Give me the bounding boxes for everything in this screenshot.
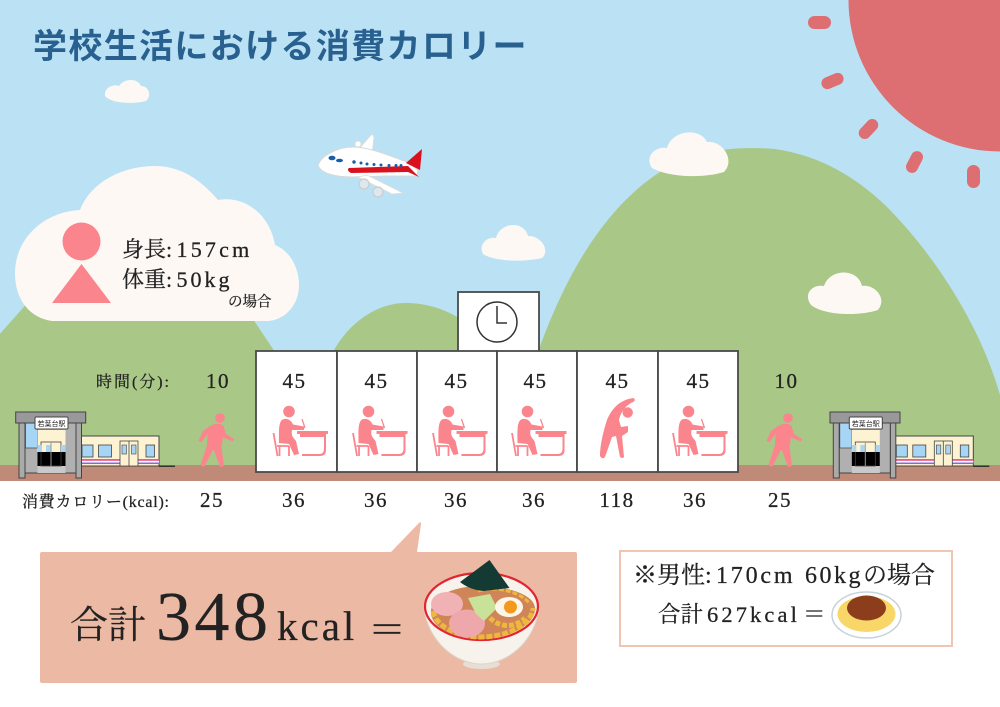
row label: minutes: 時間(分): <box>96 373 169 391</box>
cloud: person profile <box>15 166 299 321</box>
equals sign: ＝ <box>368 610 406 652</box>
panel: male note <box>620 551 952 646</box>
calorie values: 36 <box>444 488 468 512</box>
icon: ramen bowl <box>424 560 539 669</box>
minutes values <box>206 369 798 393</box>
calorie values: 36 <box>282 488 306 512</box>
calorie values: 118 <box>599 488 635 512</box>
icon: student at desk 5 <box>673 406 728 456</box>
total label: 合計 <box>70 605 146 647</box>
sun <box>808 0 1000 188</box>
icon: student at desk 4 <box>512 406 566 456</box>
note line 2: ＝ <box>803 602 826 627</box>
station sign text: 若葉台駅 <box>38 419 66 428</box>
minutes values: 45 <box>444 369 468 393</box>
note line 2: 627kcal <box>707 602 800 627</box>
icon: student at desk 3 <box>433 406 488 456</box>
total unit: kcal <box>277 603 357 649</box>
minutes values: 45 <box>282 369 306 393</box>
calorie values: 36 <box>522 488 546 512</box>
row label: calories: 消費カロリー(kcal): <box>22 493 169 511</box>
airplane <box>318 134 422 197</box>
note line 1: 60kg <box>805 563 863 589</box>
minutes values: 45 <box>606 369 630 393</box>
height and weight text: 体重: <box>122 267 172 292</box>
calorie values: 36 <box>683 488 707 512</box>
minutes values: 45 <box>524 369 548 393</box>
icon: person <box>52 222 111 303</box>
note: case label: の場合 <box>228 294 272 310</box>
minutes values: 45 <box>686 369 710 393</box>
note line 2: 合計 <box>658 602 703 627</box>
note line 1: 170cm <box>716 563 795 589</box>
title: 学校生活における消費カロリー <box>33 28 528 66</box>
icon: student at desk 2 <box>353 406 408 456</box>
calorie values: 25 <box>768 488 792 512</box>
note line 1: の場合 <box>863 562 935 589</box>
ground <box>0 465 1000 481</box>
calorie values: 25 <box>200 488 224 512</box>
note line 1: ※男性: <box>633 562 712 589</box>
height and weight text: 身長: <box>122 237 172 262</box>
cloud: upper right <box>649 132 729 176</box>
left station <box>16 412 175 478</box>
height and weight text: 50kg <box>176 267 232 292</box>
clock box <box>458 292 539 352</box>
cloud: right <box>808 272 881 314</box>
icon: stretching person <box>600 398 635 458</box>
panel: total calories callout <box>40 522 577 683</box>
total value: 348 <box>156 579 272 656</box>
calorie values: 36 <box>364 488 388 512</box>
station sign text right: 若葉台駅 <box>852 419 880 428</box>
cloud: top left small <box>105 80 149 103</box>
icon: student at desk 1 <box>274 406 328 456</box>
icon: spaghetti plate <box>832 592 901 638</box>
sky background <box>0 0 1000 482</box>
school period boxes <box>256 351 738 472</box>
cloud: center small <box>482 225 545 261</box>
mountains <box>0 148 1000 470</box>
minutes values: 10 <box>206 369 230 393</box>
height and weight text: 157cm <box>176 237 252 262</box>
icon: walking person right <box>766 413 802 467</box>
minutes values: 45 <box>364 369 388 393</box>
right station <box>830 412 989 478</box>
icon: walking person left <box>198 413 234 467</box>
minutes values: 10 <box>774 369 798 393</box>
calorie values <box>200 488 792 512</box>
